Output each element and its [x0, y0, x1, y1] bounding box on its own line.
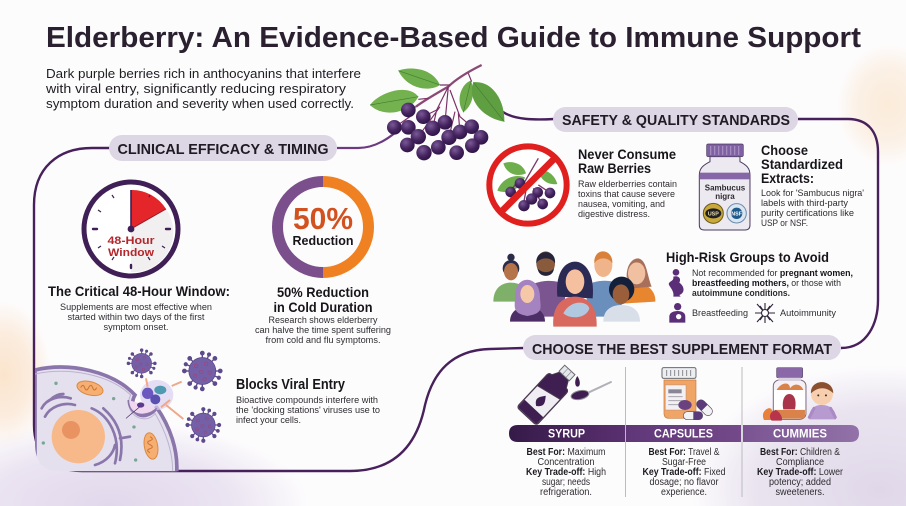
- label: autoimmunity: Autoimmunity: [780, 308, 836, 319]
- text block: syrup details: Key Trade-off: High: [526, 467, 606, 478]
- text block: gummies details: [757, 447, 844, 498]
- heading pill: safety and quality: [553, 107, 798, 132]
- text block: 48-hour window: Supplements are most effective when: [60, 302, 212, 313]
- icon: autoimmunity: [755, 303, 775, 323]
- text block: gummies details: Best For: Children &: [760, 447, 840, 458]
- label: breastfeeding: Breastfeeding: [692, 308, 748, 319]
- text block: never consume raw berries: toxins that cause severe: [578, 189, 675, 200]
- heading pill: clinical efficacy: CLINICAL EFFICACY & TIMING: [118, 141, 328, 158]
- text block: choose standardized extracts: Choose: [761, 143, 808, 158]
- text block: high-risk groups: breastfeeding mothers, or those with: [692, 278, 841, 289]
- icon: 48-hour clock: [84, 182, 178, 276]
- text block: 48-hour window: [48, 284, 230, 333]
- text block: gummies details: sweeteners.: [776, 487, 824, 498]
- heading pill: clinical efficacy: [109, 135, 337, 161]
- title: Elderberry: An Evidence-Based Guide to Immune Support: [46, 22, 861, 54]
- text block: never consume raw berries: nausea, vomiting, and: [578, 199, 665, 210]
- text block: capsules details: Best For: Travel &: [648, 447, 720, 458]
- heading pill: supplement format: CHOOSE THE BEST SUPPLEMENT FORMAT: [532, 341, 832, 358]
- text block: blocks viral entry: [236, 377, 380, 426]
- icon: syrup bottle and spoon: [517, 361, 612, 425]
- text block: choose standardized extracts: Standardized: [761, 157, 843, 172]
- text block: never consume raw berries: Raw elderberries contain: [578, 179, 677, 190]
- text block: choose standardized extracts: [761, 143, 864, 229]
- text block: capsules details: [642, 447, 726, 498]
- intro text: symptom duration and severity when used correctly.: [46, 96, 354, 111]
- text block: 50 percent reduction: from cold and flu symptoms.: [266, 335, 380, 346]
- text block: syrup details: Best For: Maximum: [526, 447, 606, 458]
- icon: capsule bottle: [662, 368, 714, 420]
- chart: 50 percent donut: [278, 182, 369, 272]
- text block: blocks viral entry: the 'docking stations' viruses use to: [236, 405, 380, 416]
- text block: syrup details: [526, 447, 606, 498]
- panel outline: safety and quality: [503, 112, 878, 348]
- text block: gummies details: Key Trade-off: Lower: [757, 467, 844, 478]
- text block: syrup details: sugar; needs: [542, 477, 590, 488]
- icon: elderberry cluster: [370, 65, 504, 160]
- icon: breastfeeding: [669, 303, 685, 323]
- format bar: syrup: SYRUP: [548, 428, 585, 440]
- text block: capsules details: dosage; no flavor: [650, 477, 719, 488]
- text block: never consume raw berries: [578, 147, 677, 220]
- intro text: with viral entry, significantly reducing respiratory: [45, 81, 347, 96]
- text block: high-risk groups: [666, 249, 853, 299]
- icon: supplement bottle: NSF: [731, 211, 743, 217]
- text block: never consume raw berries: Raw Berries: [578, 161, 651, 176]
- text block: never consume raw berries: Never Consume: [578, 147, 676, 162]
- intro text: [45, 66, 361, 111]
- text block: capsules details: Sugar-Free: [662, 457, 706, 468]
- text block: syrup details: Concentration: [538, 457, 594, 468]
- icon: pregnant woman: [669, 269, 684, 297]
- format bar: syrup: [509, 425, 625, 442]
- text block: capsules details: experience.: [661, 487, 707, 498]
- icon: gummies jar and baby: [763, 368, 836, 421]
- text block: 48-hour window: The Critical 48-Hour Window:: [48, 284, 230, 299]
- heading pill: supplement format: [523, 335, 841, 360]
- text block: blocks viral entry: Blocks Viral Entry: [236, 377, 345, 393]
- heading pill: safety and quality: SAFETY & QUALITY STANDARDS: [562, 112, 790, 129]
- panel outline link to berries: [337, 132, 396, 148]
- text block: capsules details: Key Trade-off: Fixed: [642, 467, 726, 478]
- icon: supplement bottle: USP: [708, 211, 719, 217]
- section: clinical efficacy and timing: [35, 135, 391, 473]
- text block: high-risk groups: Not recommended for pregnant women,: [692, 268, 853, 279]
- section: safety and quality standards: [489, 107, 864, 327]
- icon: supplement bottle: Sambucus: [705, 183, 746, 192]
- illustration: cell and viruses: [35, 349, 222, 473]
- text block: 50 percent reduction: [255, 284, 391, 346]
- text block: choose standardized extracts: Look for 'Sambucus nigra': [761, 188, 864, 199]
- text block: blocks viral entry: Bioactive compounds interfere with: [236, 395, 378, 406]
- text block: gummies details: potency; added: [769, 477, 831, 488]
- text block: 50 percent reduction: in Cold Duration: [274, 299, 372, 315]
- format bar: gummies: CUMMIES: [773, 428, 827, 440]
- text block: never consume raw berries: digestive distress.: [578, 209, 650, 220]
- section: supplement format: [509, 335, 859, 498]
- icon: 48-hour clock: 48-Hour: [108, 235, 155, 247]
- format bar: capsules: [626, 425, 741, 442]
- text block: choose standardized extracts: labels with third-party: [761, 198, 848, 209]
- intro text: Dark purple berries rich in anthocyanins that interfere: [46, 66, 361, 81]
- format bar: gummies: [743, 425, 859, 442]
- text block: 50 percent reduction: can halve the time spent suffering: [255, 325, 391, 336]
- chart: 50 percent donut: Reduction: [292, 233, 354, 248]
- icon: 48-hour clock: Window: [108, 247, 154, 259]
- dividers between formats: [626, 367, 742, 497]
- text block: blocks viral entry: infect your cells.: [236, 415, 301, 426]
- text block: 50 percent reduction: Research shows elderberry: [268, 315, 378, 326]
- text block: syrup details: refrigeration.: [540, 487, 592, 498]
- text block: high-risk groups: autoimmune conditions.: [692, 288, 790, 299]
- text block: gummies details: Compliance: [776, 457, 825, 468]
- icon: supplement bottle: nigra: [715, 192, 735, 201]
- icon: no raw berries: [489, 146, 567, 224]
- text block: 48-hour window: started within two days of the first: [68, 312, 205, 323]
- text block: choose standardized extracts: Extracts:: [761, 171, 814, 186]
- text block: 50 percent reduction: 50% Reduction: [277, 284, 369, 300]
- chart: 50 percent donut: 50%: [293, 201, 353, 236]
- text block: choose standardized extracts: purity certifications like: [761, 208, 854, 219]
- text block: high-risk groups: High-Risk Groups to Avoid: [666, 249, 829, 265]
- format bar: capsules: CAPSULES: [654, 428, 713, 440]
- illustration: high-risk group of people: [493, 251, 655, 327]
- icon: supplement bottle: [699, 144, 750, 230]
- text block: 48-hour window: symptom onset.: [104, 322, 168, 333]
- text block: choose standardized extracts: USP or NSF.: [761, 218, 808, 229]
- panel outline: clinical efficacy: [34, 148, 524, 471]
